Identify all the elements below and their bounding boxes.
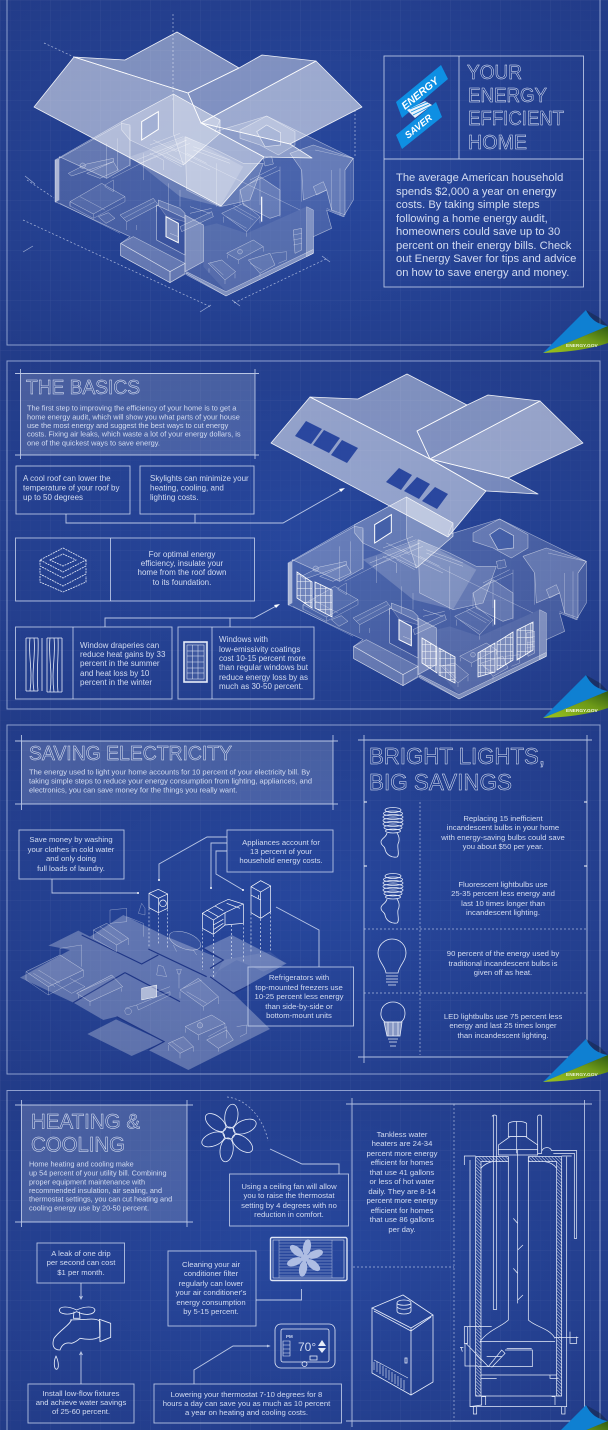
icon: washer	[149, 889, 168, 913]
text: led: energy and last 25 times longer	[449, 1021, 557, 1030]
intro text: The first step to improving the efficiency of your home is to get a	[27, 404, 237, 412]
text: tankless water heaters: per day.	[388, 1225, 416, 1234]
intro text: costs. Fixing air leaks, which waste a lot of your energy dollars, is	[27, 430, 241, 438]
callout: low-flow fixtures: and achieve water savings	[36, 1398, 126, 1407]
icon: energy.gov page curl: ENERGY.GOV	[566, 1072, 599, 1078]
heading: HEATING &	[31, 1110, 140, 1134]
panel: heating and cooling	[7, 1090, 608, 1430]
intro text: costs. By taking simple steps	[396, 199, 540, 211]
icon: energy saver logo: ENERGY	[399, 74, 442, 112]
callout: insulation	[16, 538, 254, 601]
callout: ceiling fan: reduction in comfort.	[254, 1210, 324, 1219]
callout: cold water laundry	[19, 830, 124, 879]
icon: energy.gov page curl: ENERGY.GOV	[566, 343, 599, 349]
heading: bright lights, big savings: BRIGHT LIGHTS,	[369, 743, 545, 769]
icon: ceiling fan	[200, 1097, 268, 1163]
callout: cold water laundry: Save money by washing	[29, 835, 113, 844]
intro text: use the most energy and suggest the best ways to cut energy	[27, 421, 229, 430]
text: led: than incandescent lighting.	[457, 1031, 549, 1040]
text: tankless water heaters: efficient for homes	[371, 1206, 433, 1215]
icon: energy.gov page curl	[543, 310, 608, 353]
intro text: recommended insulation, air sealing, and	[29, 1186, 162, 1195]
icon: energy.gov page curl	[543, 675, 608, 718]
heading: your energy efficient home: EFFICIENT	[468, 108, 564, 130]
icon: led bulb	[381, 1002, 405, 1046]
callout: leak: $1 per month.	[57, 1268, 105, 1277]
panel: saving electricity	[7, 725, 608, 1082]
callout: cool roof: temperature of your roof by	[23, 484, 120, 492]
intro text: one of the quickest ways to save energy.	[27, 438, 160, 448]
intro text: The energy used to light your home accounts for 10 percent of your electricity bill. By	[29, 768, 310, 776]
callout: refrigerators: bottom-mount units	[266, 1011, 332, 1020]
heading: your energy efficient home: HOME	[468, 132, 527, 154]
callout: lowering thermostat: a year on heating and cooling costs.	[185, 1408, 308, 1417]
text: replacing bulbs: Replacing 15 inefficient	[463, 814, 544, 823]
callout: refrigerators	[248, 967, 354, 1026]
heading: SAVING ELECTRICITY	[29, 743, 232, 765]
arrow: fan connector	[270, 1149, 339, 1174]
icon: window	[184, 642, 207, 682]
icon: energy saver logo: SAVER	[403, 113, 435, 141]
callout: low-emissivity windows: Windows with	[219, 635, 268, 644]
callout: cool roof	[16, 466, 130, 514]
icon: faucet	[53, 1307, 111, 1369]
heading: bright lights, big savings	[369, 743, 545, 795]
callout: appliances: Appliances account for	[242, 838, 320, 847]
heading: your energy efficient home: YOUR	[467, 62, 522, 84]
callout: draperies: percent in the summer	[80, 659, 160, 668]
callout: insulation: For optimal energy	[149, 550, 215, 559]
text: heat: traditional incandescent bulbs is	[449, 959, 558, 968]
callout: low-flow fixtures: of 25-60 percent.	[52, 1407, 110, 1416]
callout: air conditioner filter	[168, 1251, 256, 1326]
callout: draperies: Window draperies can	[80, 641, 159, 650]
house illustration with exploded roof	[23, 14, 362, 312]
intro box: heating and cooling	[15, 1100, 193, 1227]
icon: drapes	[26, 638, 62, 692]
arrow: to roof	[66, 488, 345, 523]
icon: cfl bulb two	[381, 874, 403, 923]
title box	[384, 56, 584, 287]
callout: appliances: 13 percent of your	[250, 847, 312, 856]
intro text: out Energy Saver for tips and advice	[396, 253, 576, 265]
text: tankless water heaters: efficient for homes	[371, 1158, 433, 1167]
callout: insulation: efficiency, insulate your	[141, 559, 224, 568]
callout: ceiling fan: Using a ceiling fan will allow	[241, 1182, 337, 1191]
callout: cold water laundry: your clothes in cold water	[28, 845, 115, 854]
intro text: taking simple steps to reduce your energy consumption from lighting, appliances, and	[29, 776, 312, 786]
callout: cool roof: A cool roof can lower the	[23, 474, 111, 483]
callout: refrigerators: top-mounted freezers use	[255, 983, 343, 992]
intro text: spends $2,000 a year on energy	[396, 186, 557, 198]
text: tankless water heaters: that use 86 gallons	[370, 1215, 434, 1224]
callout: leak	[37, 1243, 124, 1283]
intro text: thermostat settings, you can cut heating and	[29, 1194, 172, 1204]
intro text: Home heating and cooling make	[29, 1160, 134, 1168]
text: replacing bulbs: incandescent bulbs in your home	[447, 823, 559, 832]
callout: lowering thermostat: hours a day can save you as much as 10 percent	[163, 1399, 331, 1408]
text: replacing bulbs: you about $50 per year.	[463, 842, 543, 851]
callout: insulation: to its foundation.	[153, 578, 211, 587]
text: heat: given off as heat.	[474, 968, 532, 977]
icon: incandescent bulb	[378, 939, 406, 985]
text: tankless water heaters: or less of hot water	[370, 1177, 435, 1186]
arrow: fixtures to faucet	[80, 1352, 82, 1384]
callout: air conditioner filter: conditioner filter	[184, 1269, 239, 1278]
icon: energy saver logo	[396, 65, 448, 149]
heading: COOLING	[31, 1134, 125, 1156]
arrow: refrigerator connector	[276, 907, 319, 967]
callout: air conditioner filter: regularly can lower	[179, 1279, 244, 1288]
callout: draperies: percent in the winter	[80, 678, 152, 687]
callout: air conditioner filter: energy consumption	[176, 1298, 246, 1307]
intro text: following a home energy audit,	[396, 213, 548, 225]
callout: low-flow fixtures	[28, 1384, 134, 1423]
intro box: saving electricity	[15, 735, 338, 810]
icon: refrigerator	[251, 881, 271, 918]
icon: thermostat: PM	[286, 1334, 293, 1339]
intro text: percent on their energy bills. Check	[396, 240, 572, 252]
callout: appliances	[227, 830, 333, 872]
callout: ceiling fan: setting by 4 degrees with no	[241, 1201, 337, 1210]
icon: insulation layers	[40, 548, 86, 592]
arrow: laundry connector	[52, 879, 139, 894]
callout: leak: per second can cost	[47, 1258, 116, 1267]
text: tankless water heaters: daily. They are 8-14	[368, 1187, 436, 1196]
callout: leak: A leak of one drip	[51, 1249, 111, 1258]
icon: tank water heater	[460, 1115, 578, 1414]
heading: THE BASICS	[26, 377, 140, 399]
callout: cool roof: up to 50 degrees	[23, 493, 83, 502]
callout: refrigerators: than side-by-side or	[265, 1002, 333, 1011]
callout: air conditioner filter: your air conditioner's	[176, 1288, 246, 1297]
intro text: The average American household	[396, 172, 563, 184]
intro text: cooling energy use by 20-50 percent.	[29, 1204, 149, 1212]
callout: cold water laundry: and only doing	[46, 854, 96, 863]
callout: low-flow fixtures: Install low-flow fixtures	[43, 1389, 120, 1398]
callout: appliances: household energy costs.	[239, 856, 323, 865]
callout: low-emissivity windows: cost 10-15 percent more	[219, 654, 306, 663]
callout: air conditioner filter: by 5-15 percent.	[183, 1307, 239, 1316]
callout: draperies: and heat loss by 10	[80, 669, 150, 678]
callout: air conditioner filter: Cleaning your air	[182, 1260, 240, 1269]
arrow: thermostat connector	[194, 1345, 270, 1384]
heading: your energy efficient home	[467, 62, 564, 154]
heading	[31, 1110, 140, 1156]
text: led: LED lightbulbs use 75 percent less	[444, 1012, 562, 1021]
section frame: water heaters	[346, 1098, 592, 1427]
house illustration with skylight roof	[271, 374, 586, 699]
text: fluorescent: last 10 times longer than	[461, 899, 545, 908]
text: tankless water heaters: that use 41 gallons	[370, 1168, 434, 1177]
text: tankless water heaters: percent more energy	[367, 1149, 438, 1158]
heading: your energy efficient home: ENERGY	[468, 85, 547, 107]
callout: lowering thermostat: Lowering your thermostat 7-10 degrees for 8	[171, 1390, 322, 1399]
callout: skylights: lighting costs.	[150, 493, 198, 502]
callout: cold water laundry: full loads of laundry.	[37, 864, 105, 873]
callout: lowering thermostat	[154, 1384, 342, 1423]
text: tankless water heaters: heaters are 24-34	[372, 1139, 433, 1148]
icon: thermostat: 70°	[298, 1340, 316, 1354]
callout: low-emissivity windows: much as 30-50 percent.	[219, 682, 303, 691]
icon: energy.gov page curl	[543, 1405, 608, 1430]
callout: refrigerators: Refrigerators with	[269, 973, 329, 982]
panel: the basics	[7, 361, 608, 718]
icon: cfl bulb one	[381, 808, 403, 857]
section frame: bright lights	[358, 735, 592, 1063]
intro box: the basics	[15, 369, 259, 459]
arrows: appliances connectors	[158, 837, 244, 891]
callout: low-emissivity windows	[178, 627, 314, 699]
callout: draperies: reduce heat gains by 33	[80, 650, 166, 659]
callout: ceiling fan	[230, 1174, 348, 1226]
panel: your energy efficient home	[7, 0, 608, 353]
icon: energy.gov page curl	[543, 1039, 608, 1082]
text: replacing bulbs: with energy-saving bulbs could save	[440, 833, 565, 842]
callout: skylights	[140, 466, 254, 514]
arrow: leak to faucet	[80, 1283, 82, 1299]
intro text: on how to save energy and money.	[396, 267, 569, 279]
text: fluorescent: incandescent lighting.	[466, 908, 540, 917]
intro text: home energy audit, which will show you what parts of your house	[27, 412, 240, 422]
arrow: to windows	[105, 604, 280, 627]
callout: skylights: heating, cooling, and	[150, 484, 224, 492]
callout: low-emissivity windows: than regular windows but	[219, 663, 309, 672]
callout: low-emissivity windows: low-emissivity coatings	[219, 645, 300, 654]
intro text: electronics, you can save money for the things you really want.	[29, 786, 237, 794]
text: tankless water heaters: Tankless water	[377, 1130, 428, 1139]
intro text: homeowners could save up to 30	[396, 226, 560, 238]
intro text: up 54 percent of your utility bill. Combining	[29, 1168, 166, 1178]
intro text: proper equipment maintenance with	[29, 1178, 145, 1186]
callout: ceiling fan: you to raise the thermostat	[243, 1191, 335, 1200]
icon: tankless water heater	[372, 1295, 433, 1395]
arrow: filter connector	[256, 1289, 302, 1300]
icon: thermostat	[275, 1324, 335, 1368]
icon: oven and dishwasher	[202, 899, 243, 934]
heading: bright lights, big savings: BIG SAVINGS	[369, 769, 512, 795]
icon: air conditioner filter	[270, 1238, 347, 1280]
icon: energy.gov page curl: ENERGY.GOV	[566, 708, 599, 714]
callout: insulation: home from the roof down	[138, 568, 226, 577]
text: tankless water heaters: percent more energy	[367, 1196, 438, 1205]
callout: low-emissivity windows: reduce energy loss by as	[219, 673, 308, 682]
text: heat: 90 percent of the energy used by	[447, 949, 559, 958]
callout: draperies	[16, 627, 172, 699]
floor plan with furniture	[20, 881, 287, 1070]
callout: skylights: Skylights can minimize your	[150, 474, 249, 483]
text: fluorescent: 25-35 percent less energy and	[451, 889, 555, 898]
callout: refrigerators: 10-25 percent less energy	[255, 992, 344, 1001]
text: fluorescent: Fluorescent lightbulbs use	[458, 880, 548, 889]
